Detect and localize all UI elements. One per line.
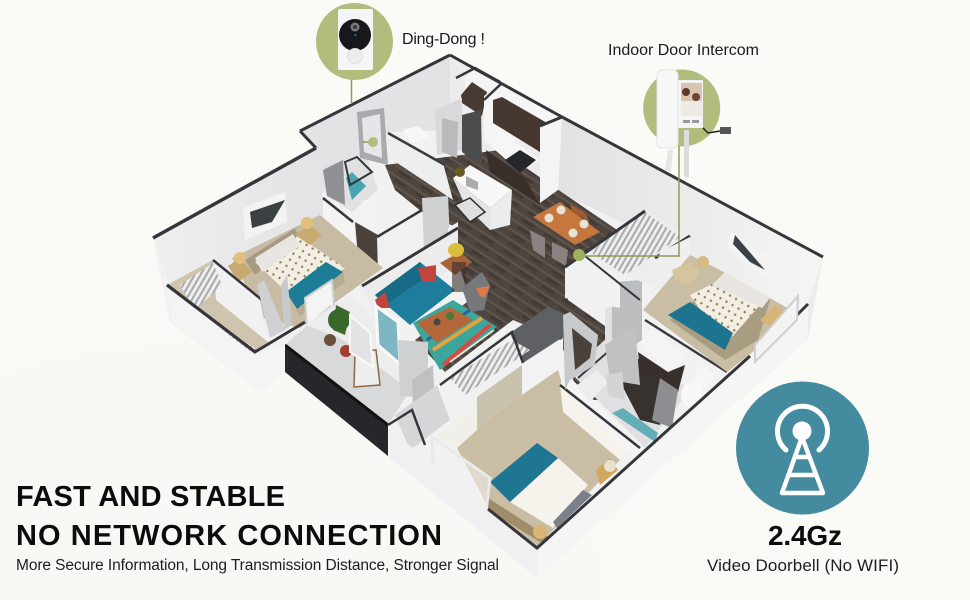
floor plan apartment <box>153 55 823 578</box>
back walls <box>153 55 823 312</box>
bathroom one <box>322 108 458 275</box>
connector line: doorbell to entrance <box>352 78 373 142</box>
label: Ding-Dong: Ding-Dong ! <box>402 31 485 48</box>
icon: signal tower <box>736 382 869 514</box>
wall and kitchen peninsula counter <box>388 126 512 230</box>
bottom bedroom <box>432 370 630 547</box>
label: indoor door intercom: Indoor Door Intercom <box>608 42 759 59</box>
icon: indoor intercom <box>643 70 731 177</box>
outer walls <box>167 257 823 578</box>
left closet and door frames <box>167 260 335 355</box>
caption: video doorbell no wifi: Video Doorbell (No WIFI) <box>707 556 899 575</box>
striped rug and coffee table <box>413 300 497 370</box>
right bedroom <box>562 117 823 372</box>
signal point: entrance door <box>368 137 378 147</box>
signal point: intercom wall <box>573 249 585 261</box>
lower closet and dark counter <box>388 307 563 450</box>
subtitle: More Secure Information, Long Transmission Distance, Stronger Signal <box>16 557 499 574</box>
icon: video doorbell <box>316 3 393 80</box>
dining table <box>530 202 600 266</box>
bathroom two <box>560 320 727 462</box>
heading line one: FAST AND STABLE <box>16 481 285 513</box>
balcony <box>285 295 436 456</box>
kitchen <box>435 55 562 205</box>
right closet <box>565 210 690 308</box>
side table, lamp and armchair <box>440 243 490 312</box>
frequency label: 2.4Gz <box>768 520 842 551</box>
main heading <box>16 481 442 552</box>
interior doors <box>563 280 642 400</box>
connector line: intercom to bedroom <box>582 146 679 256</box>
wood floor <box>375 150 632 400</box>
heading line two: NO NETWORK CONNECTION <box>16 520 442 552</box>
living room sofa <box>362 228 458 325</box>
building silhouette <box>153 55 823 578</box>
left bedroom <box>153 55 450 328</box>
